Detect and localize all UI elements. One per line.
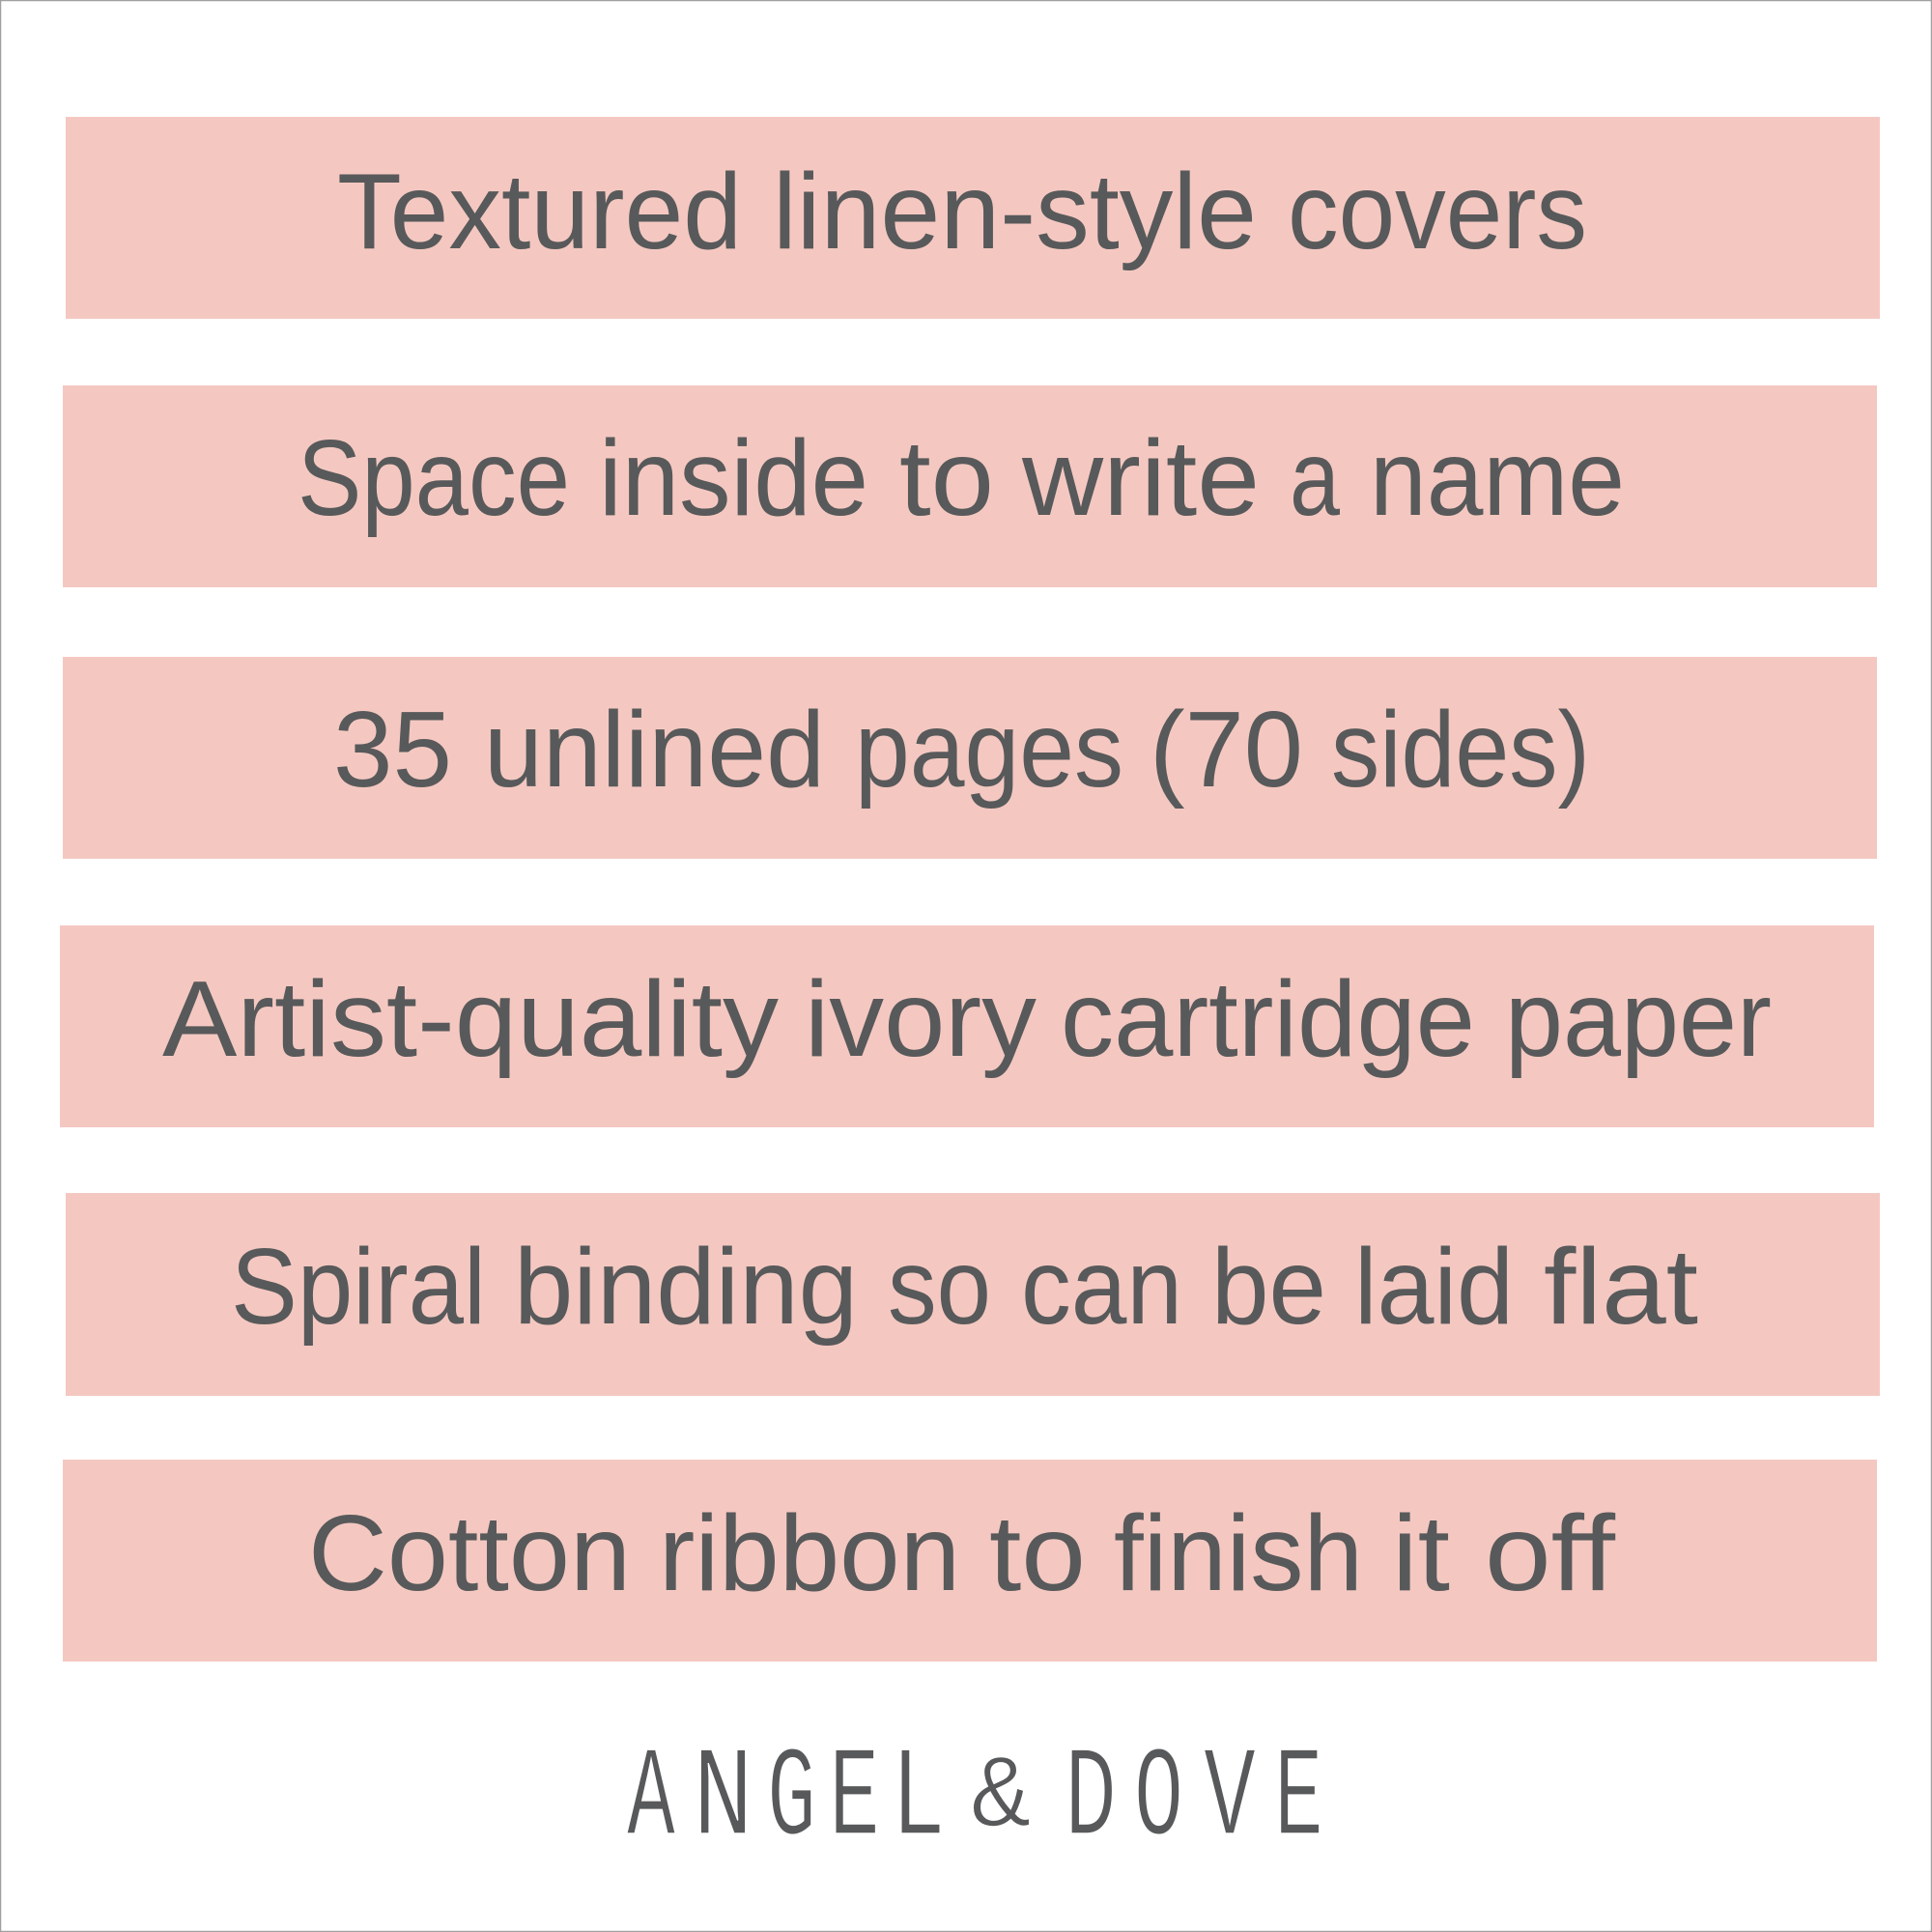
panel: binding (66, 1193, 1880, 1396)
logo: Angel & Dove: G (767, 1727, 816, 1872)
panel: pages (63, 657, 1877, 859)
logo: Angel & Dove: V (1204, 1727, 1256, 1872)
text: pages: sides) (1331, 690, 1590, 810)
logo: Angel & Dove: & (971, 1740, 1032, 1858)
text: ribbon (308, 1493, 1615, 1613)
text: paper: cartridge (1061, 959, 1475, 1079)
text: name space: a (1290, 418, 1340, 538)
logo: Angel & Dove: D (1065, 1727, 1117, 1872)
text: textured covers: Textured (337, 152, 742, 271)
text: ribbon: it (1392, 1493, 1450, 1613)
logo: Angel & Dove: O (1134, 1727, 1183, 1872)
text: ribbon: off (1485, 1493, 1615, 1613)
logo: Angel & Dove: N (693, 1727, 753, 1872)
logo: Angel & Dove: E (1274, 1727, 1323, 1872)
text: binding: so (888, 1227, 991, 1347)
text: name space: write (1021, 418, 1260, 538)
text: binding: laid (1354, 1227, 1514, 1347)
text: name space: name (1370, 418, 1625, 538)
text: binding: flat (1544, 1227, 1698, 1347)
logo: Angel & Dove: E (829, 1727, 880, 1872)
logo: Angel & Dove (627, 1727, 1323, 1872)
text: name space: to (899, 418, 994, 538)
text: name space (298, 418, 1625, 538)
panel: ribbon (63, 1460, 1877, 1662)
text: textured covers: covers (1288, 152, 1587, 271)
text: pages: 35 (333, 690, 452, 810)
text: ribbon: Cotton (308, 1493, 631, 1613)
text: binding: can (1021, 1227, 1182, 1347)
text: paper: paper (1505, 959, 1772, 1079)
text: binding: binding (514, 1227, 858, 1347)
text: ribbon: finish (1114, 1493, 1363, 1613)
text: paper (162, 959, 1772, 1079)
text: name space: inside (599, 418, 868, 538)
panel: textured covers (66, 117, 1880, 319)
text: paper: ivory (805, 959, 1037, 1079)
text: binding: Spiral (231, 1227, 486, 1347)
text: name space: Space (298, 418, 570, 538)
text: ribbon: ribbon (659, 1493, 960, 1613)
text: pages: unlined (484, 690, 825, 810)
text: textured covers (337, 152, 1587, 271)
text: binding (231, 1227, 1698, 1347)
logo: Angel & Dove: L (891, 1727, 946, 1872)
panel: name space (63, 385, 1877, 587)
text: textured covers: linen-style (773, 152, 1257, 271)
text: pages: (70 (1150, 690, 1303, 810)
logo: Angel & Dove: A (627, 1727, 675, 1872)
text: ribbon: to (989, 1493, 1086, 1613)
text: pages: pages (855, 690, 1123, 810)
text: pages (333, 690, 1590, 810)
text: binding: be (1211, 1227, 1326, 1347)
text: paper: Artist-quality (162, 959, 780, 1079)
panel: paper (60, 925, 1874, 1127)
